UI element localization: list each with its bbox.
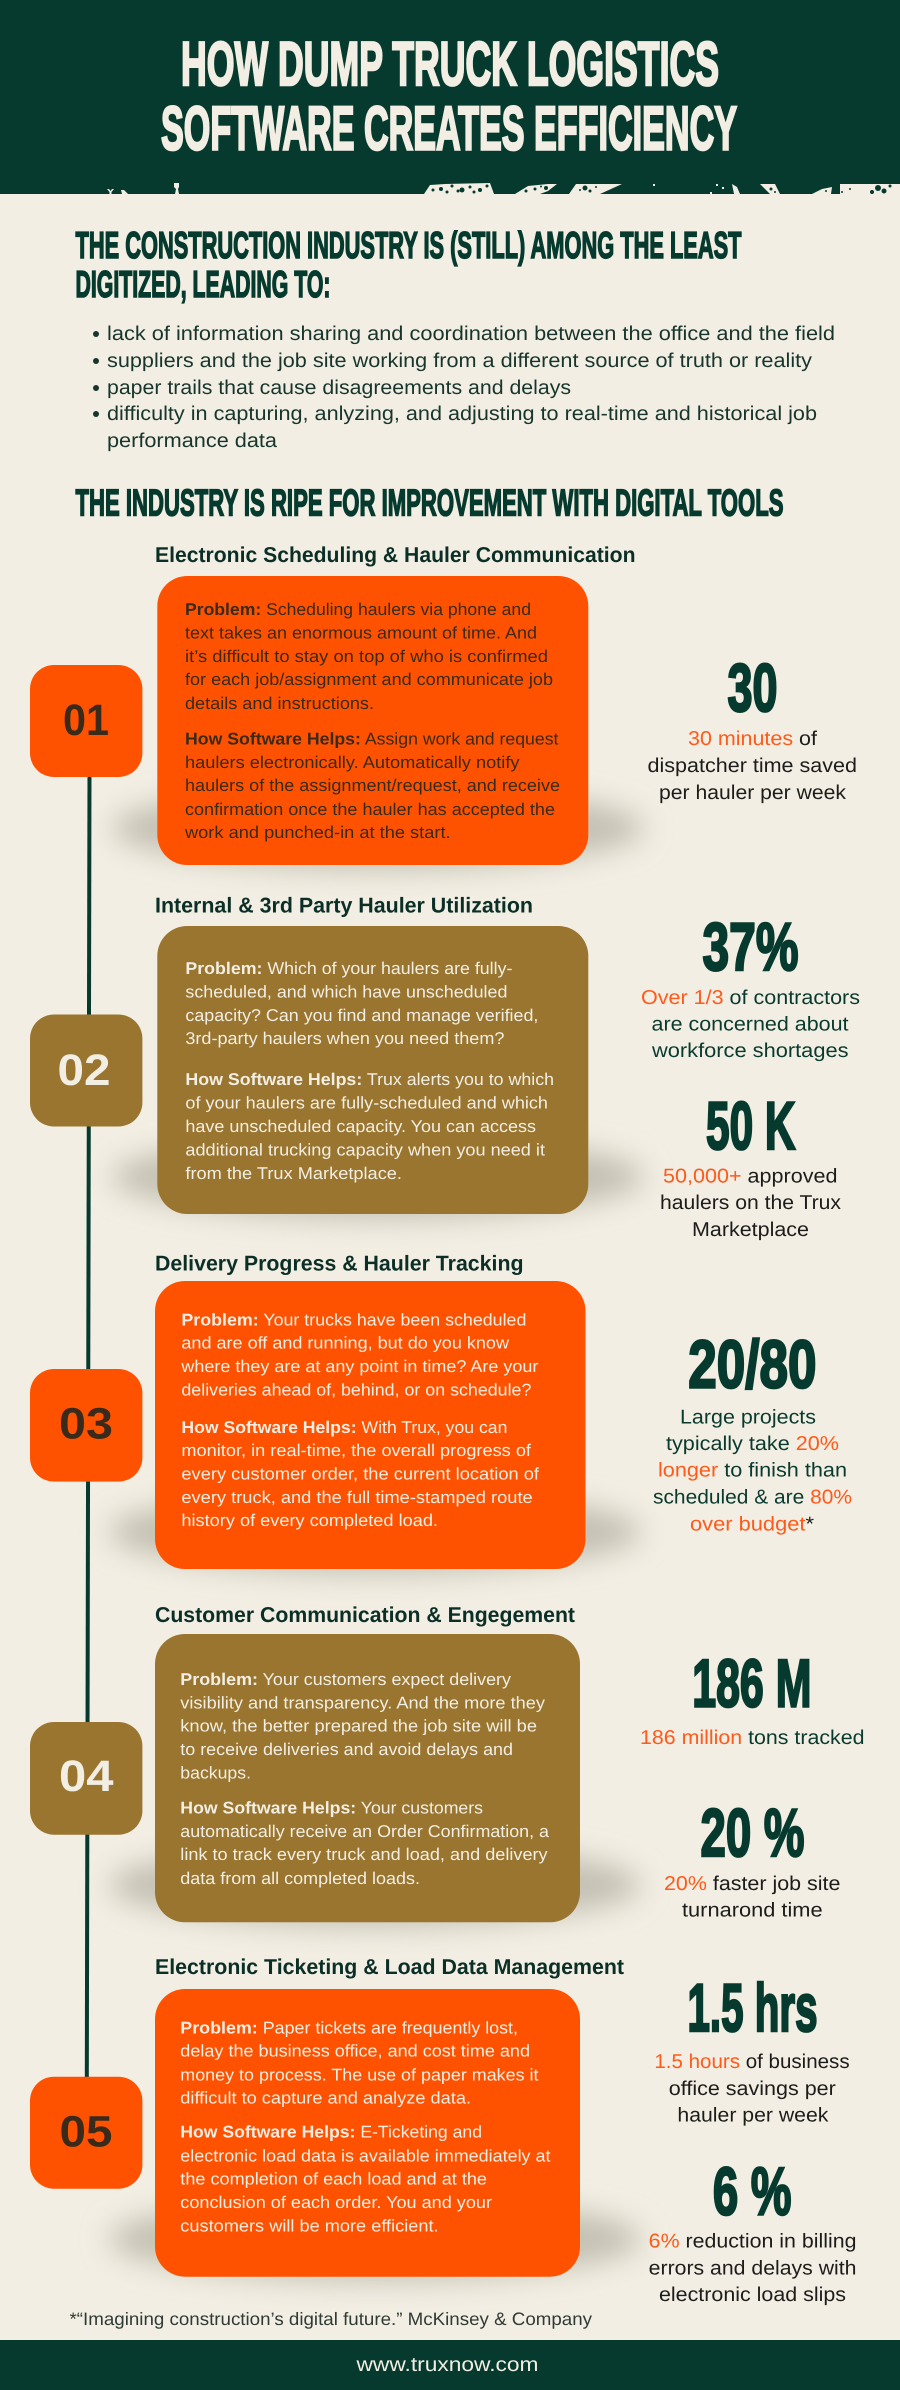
stat: 20/80: Large projects	[680, 1406, 816, 1428]
step 01 card: text takes an enormous amount of time. And	[185, 624, 537, 642]
stat: 20 %	[664, 1796, 840, 1922]
step 03 card: How Software Helps: With Trux, you can	[181, 1418, 507, 1437]
stat: 20 %: 20% faster job site	[664, 1873, 840, 1895]
bullet list: difficulty in capturing, anlyzing, and adjusting to real-time and historical job	[107, 403, 817, 425]
intro heading	[76, 224, 742, 305]
step 01 card: How Software Helps: Assign work and request	[185, 730, 559, 748]
step 02 shadow	[112, 1135, 644, 1219]
stat: 30: per hauler per week	[659, 782, 847, 804]
timeline line	[87, 770, 90, 2080]
step 05 card: the completion of each load and at the	[180, 2170, 487, 2189]
stat: 6 %	[649, 2154, 856, 2306]
bullet list	[93, 323, 835, 452]
title	[161, 30, 737, 164]
stat: 20/80: longer to finish than	[658, 1460, 847, 1482]
panel: step 03	[30, 1251, 852, 1574]
stat: 37%: 37%	[702, 910, 798, 985]
intro heading: DIGITIZED, LEADING TO:	[76, 263, 330, 305]
panel: step 02	[30, 894, 860, 1241]
step 02 badge: 02	[58, 1046, 110, 1095]
stat: 30: 30	[728, 651, 778, 726]
stat: 186 M: 186 M	[692, 1646, 812, 1722]
stat: 37%: Over 1/3 of contractors	[641, 987, 860, 1009]
step 01 card: Problem: Scheduling haulers via phone and	[185, 600, 531, 619]
stat: 50 K	[660, 1089, 841, 1241]
stat: 50 K: Marketplace	[692, 1219, 809, 1241]
header band	[0, 0, 900, 194]
step 05 card: electronic load data is available immediately at	[180, 2146, 551, 2165]
step 05 card: customers will be more efficient.	[180, 2216, 439, 2235]
step 03 card: where they are at any point in time? Are your	[180, 1357, 539, 1376]
bullet list: lack of information sharing and coordination between the office and the field	[107, 323, 835, 345]
step 01 card: it’s difficult to stay on top of who is confirmed	[185, 647, 548, 666]
step 04 card: How Software Helps: Your customers	[180, 1799, 483, 1818]
step 05 shadow	[109, 2197, 641, 2281]
step 01 heading: Electronic Scheduling & Hauler Communication	[155, 543, 636, 567]
stat: 6 %: 6% reduction in billing	[649, 2231, 856, 2253]
step 04 card: visibility and transparency. And the more they	[180, 1693, 546, 1712]
step 05 badge: 05	[60, 2108, 112, 2157]
step 05 card	[155, 1989, 580, 2277]
bullet list: suppliers and the job site working from a different source of truth or reality	[107, 350, 812, 372]
torn edge texture	[107, 183, 900, 194]
step 02 card: of your haulers are fully-scheduled and which	[185, 1094, 548, 1113]
stat: 37%: workforce shortages	[651, 1040, 848, 1062]
step 03 card: history of every completed load.	[181, 1511, 438, 1530]
panel: step 01	[30, 543, 857, 870]
step 03 card: and are off and running, but do you know	[181, 1334, 510, 1353]
step 02 card: Problem: Which of your haulers are fully-	[185, 959, 512, 978]
step 05 heading: Electronic Ticketing & Load Data Management	[155, 1955, 624, 1979]
step 02 badge	[30, 1014, 142, 1126]
step 01 card	[157, 576, 588, 865]
stat: 1.5 hrs: 1.5 hours of business	[654, 2051, 850, 2073]
step 01 shadow	[112, 786, 644, 870]
step 05 card: Problem: Paper tickets are frequently lost,	[180, 2018, 518, 2037]
stat: 20/80: scheduled & are 80%	[653, 1486, 852, 1508]
step 03 card: every customer order, the current location of	[181, 1464, 539, 1484]
step 03 card: monitor, in real-time, the overall progress of	[181, 1441, 531, 1460]
step 03 badge: 03	[59, 1400, 113, 1449]
step 02 card: 3rd-party haulers when you need them?	[185, 1029, 504, 1048]
step 03 shadow	[109, 1490, 641, 1574]
stat: 20/80: typically take 20%	[666, 1433, 839, 1455]
step 02 card	[157, 926, 588, 1214]
step 04 badge: 04	[59, 1752, 114, 1801]
step 03 heading: Delivery Progress & Hauler Tracking	[155, 1251, 524, 1275]
step 02 card: have unscheduled capacity. You can access	[185, 1117, 536, 1136]
step 04 badge	[30, 1722, 142, 1835]
step 02 card: from the Trux Marketplace.	[185, 1164, 402, 1183]
step 01 card: confirmation once the hauler has accepted the	[185, 800, 555, 819]
step 01 badge: 01	[63, 696, 109, 745]
stat: 6 %: electronic load slips	[659, 2284, 846, 2306]
stat: 37%: are concerned about	[652, 1014, 849, 1036]
step 04 card	[155, 1634, 580, 1922]
stat: 1.5 hrs: 1.5 hrs	[688, 1971, 818, 2046]
step 03 card: deliveries ahead of, behind, or on schedule?	[181, 1380, 531, 1399]
panel: step 05	[30, 1955, 856, 2306]
stat: 1.5 hrs: hauler per week	[677, 2105, 829, 2127]
step 04 card: automatically receive an Order Confirmation, a	[180, 1822, 550, 1841]
website: www.truxnow.com	[355, 2354, 538, 2376]
stat: 1.5 hrs	[654, 1971, 850, 2127]
bullet list: paper trails that cause disagreements and delays	[107, 377, 571, 399]
stat: 30	[648, 651, 857, 804]
step 01 card: details and instructions.	[185, 694, 374, 713]
stat: 20 %: turnarond time	[682, 1900, 823, 1922]
stat: 50 K: 50 K	[706, 1089, 796, 1164]
step 04 heading: Customer Communication & Engegement	[155, 1603, 575, 1627]
stat: 20 %: 20 %	[700, 1796, 804, 1871]
step 04 card: Problem: Your customers expect delivery	[180, 1670, 512, 1689]
step 05 card: delay the business office, and cost time and	[180, 2042, 530, 2061]
stat: 50 K: haulers on the Trux	[660, 1192, 841, 1214]
step 04 shadow	[109, 1843, 641, 1927]
step 05 card: money to process. The use of paper makes it	[180, 2065, 539, 2084]
step 02 heading: Internal & 3rd Party Hauler Utilization	[155, 894, 533, 918]
step 05 badge	[30, 2077, 142, 2189]
stat: 30: dispatcher time saved	[648, 755, 857, 777]
step 01 card: work and punched-in at the start.	[184, 823, 451, 842]
stat: 1.5 hrs: office savings per	[669, 2078, 836, 2100]
step 03 card	[155, 1281, 586, 1569]
step 05 card: difficult to capture and analyze data.	[180, 2089, 471, 2108]
step 02 card: How Software Helps: Trux alerts you to which	[185, 1070, 554, 1089]
step 02 card: capacity? Can you find and manage verified,	[185, 1006, 538, 1025]
step 04 card: backups.	[180, 1764, 251, 1783]
stat: 20/80: 20/80	[688, 1328, 816, 1402]
stat: 186 M	[640, 1646, 864, 1749]
step 02 card: scheduled, and which have unscheduled	[185, 982, 507, 1002]
stat: 6 %: 6 %	[713, 2154, 792, 2230]
stat: 6 %: errors and delays with	[649, 2257, 856, 2279]
stat: 37%	[641, 910, 860, 1062]
step 01 card: haulers of the assignment/request, and receive	[185, 776, 560, 795]
panel: step 04	[30, 1603, 864, 1927]
stat: 186 M: 186 million tons tracked	[640, 1727, 864, 1749]
step 04 card: to receive deliveries and avoid delays and	[180, 1740, 513, 1759]
step 03 card: Problem: Your trucks have been scheduled	[181, 1310, 526, 1329]
stat: 30: 30 minutes of	[688, 728, 817, 750]
step 01 badge	[30, 665, 142, 777]
stat: 50 K: 50,000+ approved	[663, 1166, 838, 1188]
step 05 card: conclusion of each order. You and your	[180, 2193, 492, 2212]
step 04 card: link to track every truck and load, and delivery	[180, 1845, 548, 1864]
step 03 card: every truck, and the full time-stamped route	[181, 1488, 533, 1507]
footnote: *“Imagining construction’s digital future.” McKinsey & Company	[70, 2309, 592, 2329]
step 01 card: for each job/assignment and communicate job	[185, 670, 553, 689]
step 03 badge	[30, 1369, 142, 1482]
step 01 card: haulers electronically. Automatically notify	[185, 753, 520, 772]
stat: 20/80: over budget *	[690, 1513, 814, 1535]
stat: 20/80	[653, 1328, 852, 1535]
bullet list: performance data	[107, 430, 278, 452]
step 04 card: data from all completed loads.	[180, 1869, 420, 1888]
step 04 card: know, the better prepared the job site will be	[180, 1717, 537, 1736]
step 02 card: additional trucking capacity when you need it	[185, 1140, 545, 1160]
step 05 card: How Software Helps: E-Ticketing and	[180, 2123, 482, 2142]
footer band	[0, 2340, 900, 2390]
